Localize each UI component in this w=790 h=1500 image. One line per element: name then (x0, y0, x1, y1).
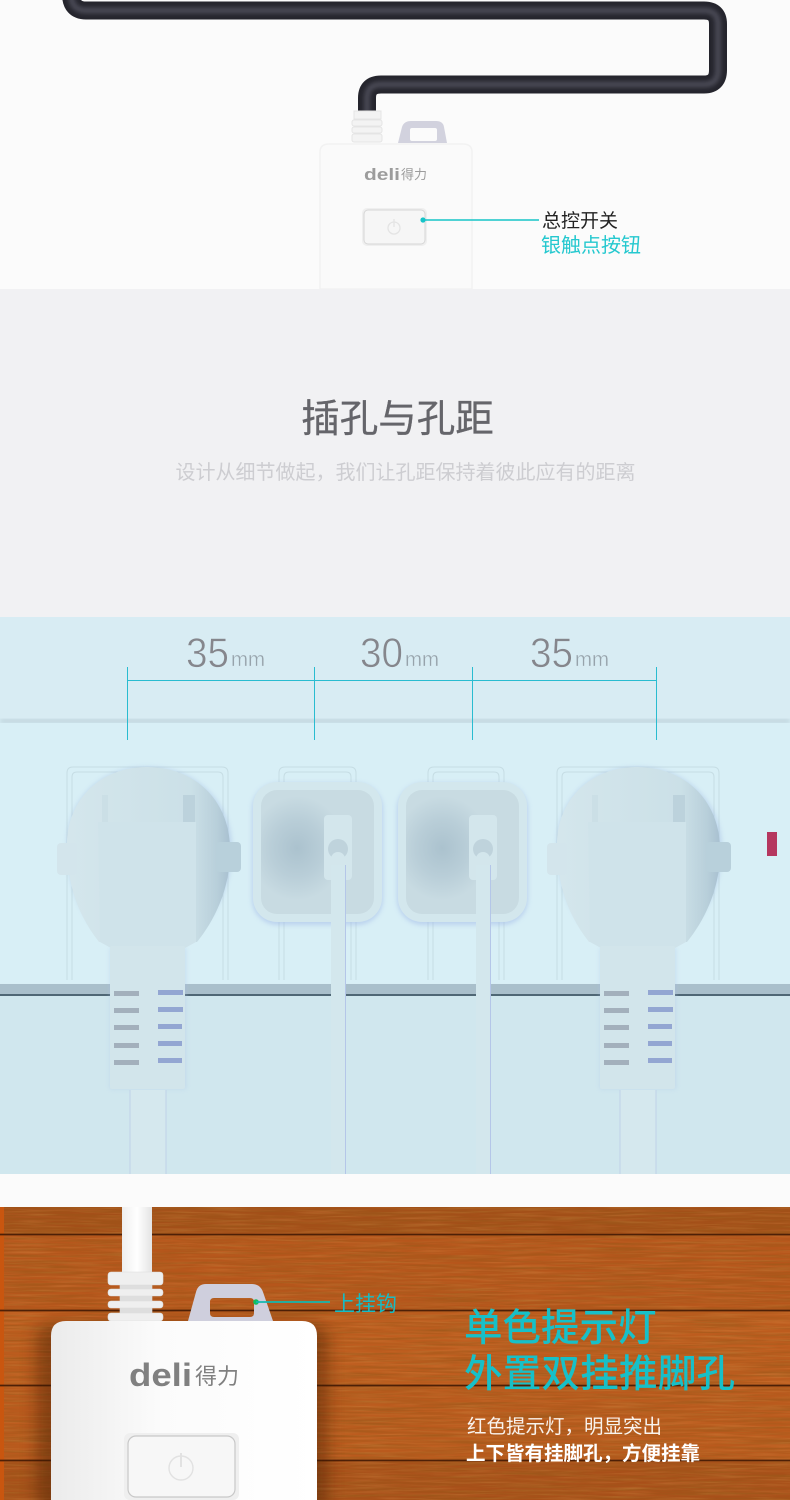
dimension lines: 35 (530, 629, 573, 676)
socket outlines (67, 767, 719, 980)
small plug 2 (397, 782, 528, 1174)
red indicator light (767, 832, 777, 856)
dimension lines: mm (405, 649, 439, 671)
dimension lines (127, 629, 657, 740)
description (466, 1416, 700, 1465)
panel: heading band (0, 289, 790, 617)
strain relief (352, 111, 382, 142)
power strip body (51, 1321, 317, 1500)
headline (464, 1307, 735, 1396)
top hook (188, 1284, 273, 1321)
strain relief (108, 1272, 163, 1321)
brand logo: 得力 (401, 167, 427, 182)
description: 上下皆有挂脚孔，方便挂靠 (466, 1442, 700, 1465)
power button (362, 208, 427, 246)
wood background (0, 1207, 790, 1500)
panel: master switch (0, 0, 790, 289)
callout: top hook: 上挂钩 (334, 1293, 397, 1316)
brand logo (364, 165, 427, 184)
dimension lines: 35 (186, 629, 229, 676)
callout: master switch (420, 210, 641, 257)
strip surfaces (0, 617, 790, 1174)
brand logo (129, 1357, 239, 1393)
dimension lines: mm (231, 649, 265, 671)
headline: 单色提示灯 (464, 1307, 657, 1350)
description: 红色提示灯，明显突出 (467, 1416, 662, 1438)
callout: top hook (253, 1293, 397, 1316)
panel: wood product view (0, 1207, 790, 1500)
top hook (398, 121, 447, 143)
brand logo: deli (129, 1357, 192, 1393)
dimension lines: mm (575, 649, 609, 671)
panel: white gap (0, 1174, 790, 1207)
subtitle: 设计从细节做起，我们让孔距保持着彼此应有的距离 (176, 461, 636, 484)
white cord (122, 1207, 152, 1273)
brand logo: deli (364, 165, 400, 184)
brand logo: 得力 (195, 1364, 239, 1389)
dimension lines: 30 (360, 629, 403, 676)
callout: master switch: 总控开关 (542, 210, 618, 232)
panel: socket spacing (0, 617, 790, 1174)
small plug 1 (252, 782, 383, 1174)
large plug right (547, 767, 731, 1174)
title: 插孔与孔距 (301, 398, 494, 441)
power button (124, 1433, 239, 1500)
power strip body (320, 144, 472, 289)
large plug left (57, 767, 241, 1174)
callout: master switch: 银触点按钮 (541, 234, 641, 257)
power cord (71, 0, 718, 114)
product shadow (36, 1324, 328, 1500)
headline: 外置双挂推脚孔 (464, 1353, 735, 1396)
